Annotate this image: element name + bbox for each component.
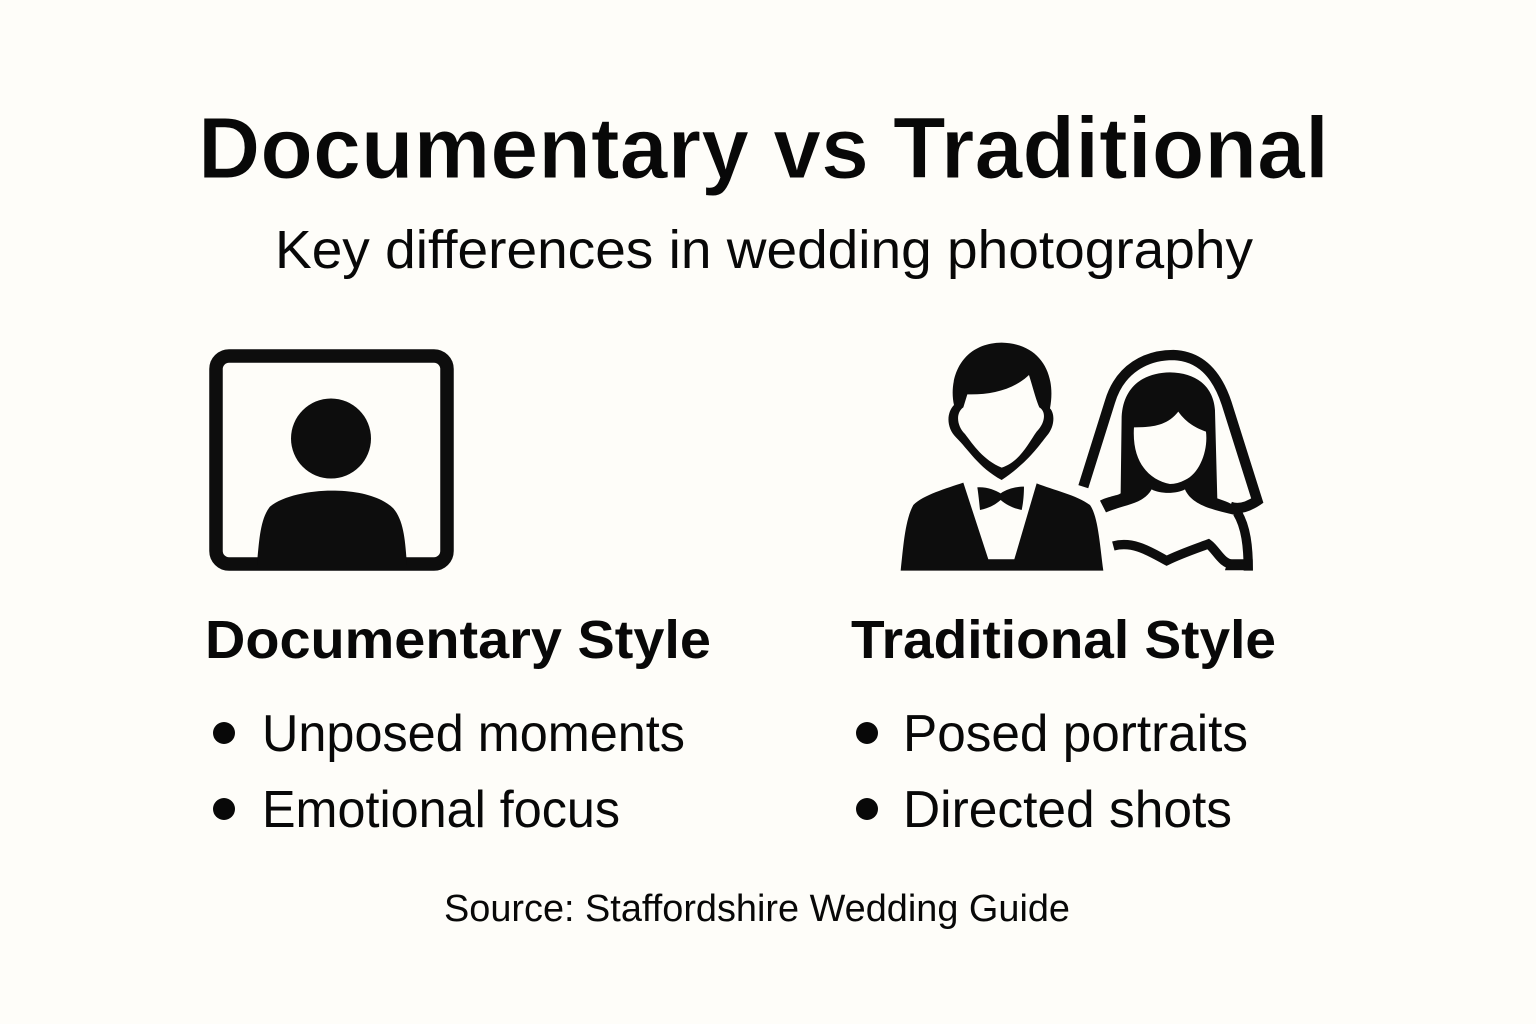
bullet list: documentary: Unposed moments [262, 705, 685, 763]
source note: Source: Staffordshire Wedding Guide [444, 888, 1070, 930]
heading: traditional style: Traditional Style [851, 610, 1276, 670]
groom suit [901, 483, 1103, 571]
icon: groom and bride [901, 343, 1257, 571]
bullet list: documentary: Emotional focus [262, 781, 620, 839]
subtitle: Key differences in wedding photography [275, 220, 1253, 280]
bride veil [1083, 355, 1257, 508]
bride dress [1237, 513, 1248, 571]
bullet list: traditional: Directed shots [903, 781, 1232, 839]
bullet list: documentary [213, 705, 685, 839]
panel: traditional style [851, 343, 1276, 839]
bow tie [977, 487, 1024, 510]
bride hair [1100, 372, 1243, 515]
icon: portrait in frame [216, 356, 447, 565]
heading: documentary style: Documentary Style [205, 610, 711, 670]
title: Documentary vs Traditional [198, 100, 1329, 197]
groom head [948, 343, 1053, 480]
bullet list: traditional: Posed portraits [903, 705, 1248, 763]
panel: documentary style [205, 356, 711, 839]
bullet list: traditional [856, 705, 1248, 839]
